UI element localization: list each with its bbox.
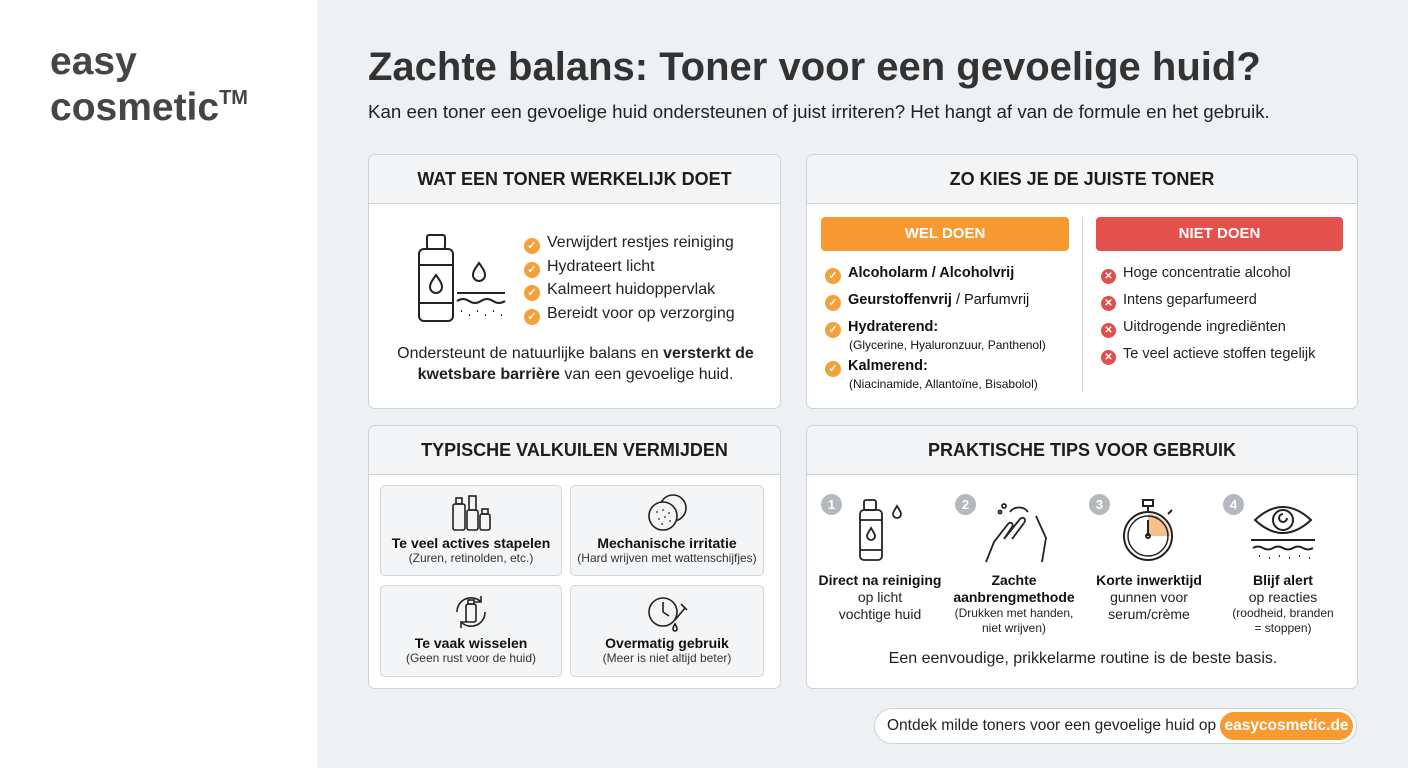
checklist: Bereidt voor op verzorging: [547, 305, 735, 322]
panel: practical tips: Zachte aanbrengmethode: [953, 572, 1075, 605]
tile: switching: Te vaak wisselen: [415, 635, 527, 651]
tile: mechanical: (Hard wrijven met wattenschijfjes): [577, 551, 757, 565]
logo: [50, 40, 248, 129]
do list: ✓: [828, 363, 838, 375]
tile: stacking: Te veel actives stapelen: [392, 535, 550, 551]
do list: Alcoholarm / Alcoholvrij: [848, 265, 1014, 281]
checklist: Kalmeert huidoppervlak: [547, 281, 715, 298]
link pill: [1220, 712, 1353, 740]
do list: (Niacinamide, Allantoïne, Bisabolol): [849, 377, 1038, 391]
do list: Geurstoffenvrij / Parfumvrij: [848, 292, 1029, 308]
panel: practical tips: gunnen voor: [1110, 589, 1188, 605]
do list: ✓: [828, 270, 838, 282]
panel: practical tips: Blijf alert: [1253, 572, 1313, 588]
checklist: ✓: [527, 264, 537, 276]
don't label: NIET DOEN: [1179, 225, 1260, 242]
checklist: Hydrateert licht: [547, 258, 655, 275]
do list: Kalmerend:: [848, 358, 928, 374]
tip 1: op licht: [858, 589, 902, 605]
summary text: Een eenvoudige, prikkelarme routine is de beste basis.: [889, 650, 1277, 667]
don't list: Hoge concentratie alcohol: [1123, 265, 1291, 281]
heading: [369, 155, 780, 204]
don't list: Uitdrogende ingrediënten: [1123, 319, 1286, 335]
tile: overuse: Overmatig gebruik: [605, 635, 729, 651]
tip 2: [953, 494, 1075, 635]
tile: stacking: [380, 485, 562, 576]
link pill: easycosmetic.de: [1224, 717, 1349, 734]
tile: mechanical: [570, 485, 764, 576]
tile: stacking: (Zuren, retinolden, etc.): [409, 551, 533, 565]
panel: practical tips: 4: [1230, 497, 1237, 512]
panel: practical tips: 2: [962, 497, 969, 512]
do list: [825, 265, 1046, 391]
panel: pitfalls: [368, 425, 781, 689]
don't label: [1096, 217, 1343, 251]
tile: overuse: [570, 585, 764, 677]
subtitle: Kan een toner een gevoelige huid ondersteunen of juist irriteren? Het hangt af van de formule en het gebruik.: [368, 101, 1270, 122]
heading: TYPISCHE VALKUILEN VERMIJDEN: [421, 440, 728, 460]
do list: ✓: [828, 297, 838, 309]
don't list: ✕: [1104, 325, 1113, 336]
tile: switching: [380, 585, 562, 677]
logo: cosmeticTM: [50, 86, 248, 129]
panel: practical tips: (Drukken met handen, niet wrijven): [955, 606, 1073, 635]
tile: switching: (Geen rust voor de huid): [406, 651, 536, 665]
do label: WEL DOEN: [905, 225, 985, 242]
tip 1: Direct na reiniging: [819, 572, 941, 588]
footer call-to-action: Ontdek milde toners voor een gevoelige huid op: [887, 717, 1216, 734]
don't list: ✕: [1104, 298, 1113, 309]
do list: (Glycerine, Hyaluronzuur, Panthenol): [849, 338, 1046, 352]
panel: practical tips: 3: [1096, 497, 1103, 512]
do list: Hydraterend:: [848, 319, 938, 335]
don't list: Intens geparfumeerd: [1123, 292, 1257, 308]
sidebar: [0, 0, 317, 768]
tip 1: vochtige huid: [839, 606, 921, 622]
tip 4: [1223, 494, 1334, 635]
tile: overuse: (Meer is niet altijd beter): [603, 651, 731, 665]
do label: [821, 217, 1069, 251]
heading: [807, 426, 1357, 475]
footer call-to-action: [874, 708, 1357, 744]
heading: WAT EEN TONER WERKELIJK DOET: [417, 169, 732, 189]
heading: PRAKTISCHE TIPS VOOR GEBRUIK: [928, 440, 1236, 460]
icon: bottle and skin: [418, 234, 506, 322]
don't list: ✕: [1104, 352, 1113, 363]
tip 1: 1: [828, 497, 835, 512]
panel: practical tips: Korte inwerktijd: [1096, 572, 1202, 588]
tip 3: [1089, 494, 1202, 622]
panel: practical tips: = stoppen): [1254, 621, 1312, 635]
panel: practical tips: (roodheid, branden: [1232, 606, 1334, 620]
panel: what toner does: [368, 154, 781, 409]
heading: [369, 426, 780, 475]
logo: easy: [50, 40, 137, 83]
summary text: Ondersteunt de natuurlijke balans en versterkt de kwetsbare barrière van een gevoelige huid.: [397, 345, 754, 383]
panel: practical tips: [806, 425, 1358, 689]
tip 1: [819, 494, 941, 622]
checklist: ✓: [527, 311, 537, 323]
checklist: ✓: [527, 240, 537, 252]
heading: ZO KIES JE DE JUISTE TONER: [950, 169, 1214, 189]
don't list: [1101, 265, 1316, 365]
checklist: Verwijdert restjes reiniging: [547, 234, 734, 251]
heading: [807, 155, 1357, 204]
tile: mechanical: Mechanische irritatie: [597, 535, 737, 551]
checklist: ✓: [527, 287, 537, 299]
panel: practical tips: serum/crème: [1108, 606, 1190, 622]
panel: choose the right toner: [806, 154, 1358, 409]
checklist: [524, 234, 735, 325]
don't list: Te veel actieve stoffen tegelijk: [1123, 346, 1315, 362]
don't list: ✕: [1104, 271, 1113, 282]
title: Zachte balans: Toner voor een gevoelige huid?: [368, 45, 1261, 89]
do list: ✓: [828, 324, 838, 336]
panel: practical tips: op reacties: [1249, 589, 1317, 605]
